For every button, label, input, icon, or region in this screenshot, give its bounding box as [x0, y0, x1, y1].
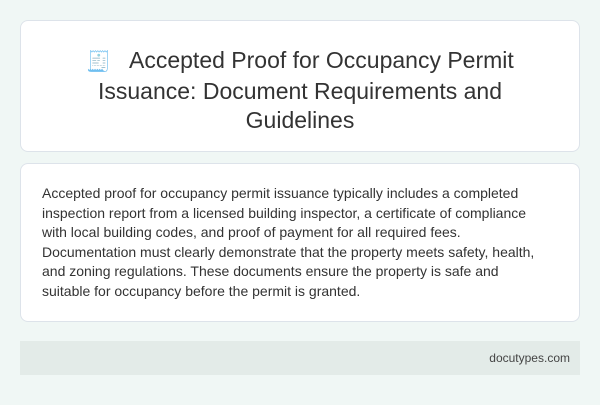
footer: [20, 341, 580, 375]
title panel: [20, 20, 580, 152]
panel: description: [20, 163, 580, 322]
text block: Accepted proof for occupancy permit issuance typically includes a completed inspection report from a licensed building inspector, a certificate of compliance with local building codes, and proof of payment for all required fees. Documentation must clearly demonstrate that the property meets safety, health, and zoning regulations. These documents ensure the property is safe and: [42, 185, 534, 279]
text block: suitable for occupancy before the permit is granted.: [42, 283, 360, 299]
title: 🧾 Accepted Proof for Occupancy Permit Issuance: Document Requirements and Guidelines: [86, 47, 514, 133]
footer: docutypes.com: [489, 351, 570, 365]
